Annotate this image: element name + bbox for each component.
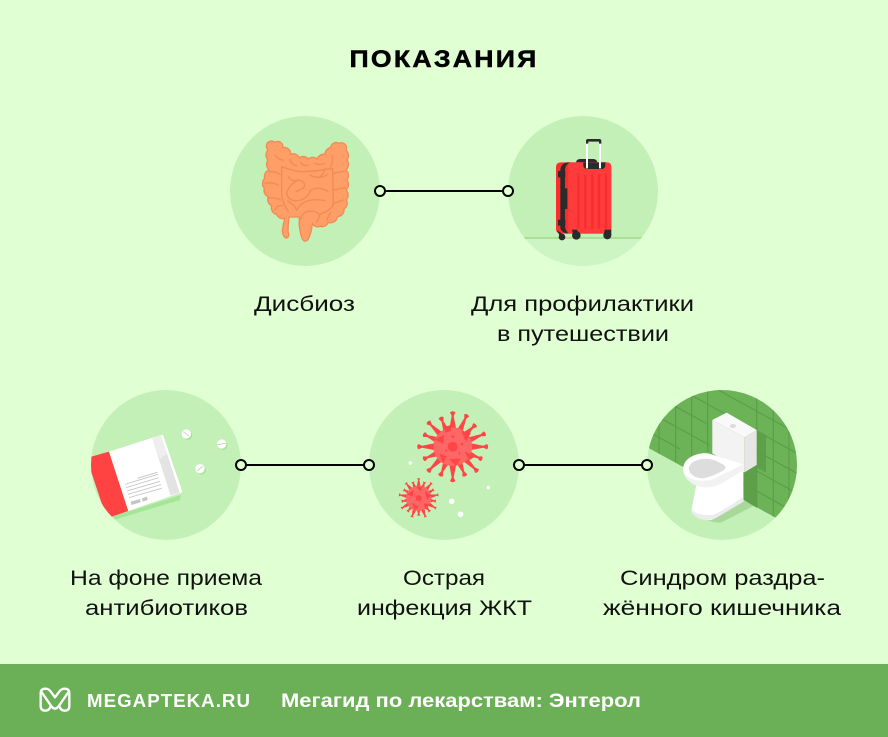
label: infection line 2: инфекция ЖКТ [357, 597, 532, 620]
label: IBS line 1: Синдром раздра- [620, 567, 825, 590]
panel: antibiotics icon [87, 390, 241, 540]
connector: left bottom [236, 460, 374, 470]
label: antibiotics line 2: антибиотиков [85, 597, 248, 620]
panel: infection icon [369, 390, 519, 540]
label: dysbiosis: Дисбиоз [254, 293, 355, 316]
label: IBS line 2: жённого кишечника [603, 597, 841, 620]
footer band [0, 664, 888, 737]
icon: pills [182, 429, 228, 475]
label: travel: Для профилактики [471, 293, 694, 316]
guide subtitle: Мегагид по лекарствам: Энтерол [281, 691, 641, 712]
label: travel line 2: в путешествии [497, 323, 669, 346]
panel: IBS icon [647, 390, 797, 540]
panel: travel icon [508, 116, 658, 266]
icon: pack of pills [87, 435, 182, 520]
panel: dysbiosis icon [230, 116, 380, 266]
label: infection line 1: Острая [403, 567, 485, 590]
label: antibiotics line 1: На фоне приема [70, 567, 262, 590]
title: ПОКАЗАНИЯ [350, 46, 538, 73]
icon: logo [41, 689, 69, 711]
brand name: MEGAPTEKA.RU [87, 691, 251, 711]
connector: right bottom [514, 460, 652, 470]
icon: red suitcase [556, 139, 611, 240]
icon: large virus [417, 411, 488, 482]
ground [524, 237, 642, 266]
connector: top row [375, 186, 513, 196]
particles [409, 461, 490, 517]
icon: small virus [399, 478, 439, 518]
icon: intestines [263, 141, 349, 241]
icon: toilet [683, 413, 757, 522]
tiled wall [649, 390, 797, 518]
